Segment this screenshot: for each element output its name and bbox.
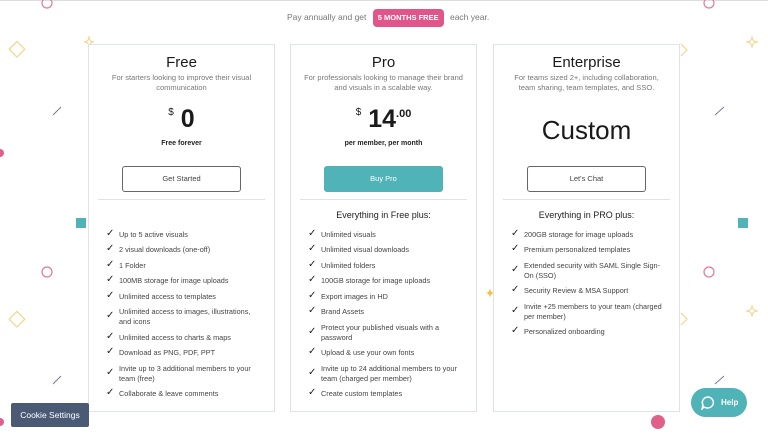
panel: pro: Create custom templates xyxy=(321,389,402,398)
panel: pro xyxy=(290,44,477,412)
panel: pro: For professionals looking to manage their brand and visuals in a scalable way. xyxy=(304,73,463,92)
panel: enterprise: Personalized onboarding xyxy=(524,327,605,336)
panel: pro: Pro xyxy=(372,54,395,71)
panel: free: Free xyxy=(166,54,197,71)
panel: free: Download as PNG, PDF, PPT xyxy=(119,348,215,357)
cookie settings button xyxy=(11,403,89,427)
panel: enterprise: Everything in PRO plus: xyxy=(539,210,634,220)
panel: free: $ 0 xyxy=(168,105,195,133)
panel: pro: Upload & use your own fonts xyxy=(321,348,414,357)
panel: pro: Unlimited visuals xyxy=(321,230,376,239)
panel: pro: $ 14.00 xyxy=(356,105,411,133)
panel: free: Up to 5 active visuals xyxy=(119,230,188,239)
top border line xyxy=(0,0,768,1)
panel: free: Get Started xyxy=(162,174,201,183)
help button xyxy=(691,388,747,417)
panel: pro: Everything in Free plus: xyxy=(336,210,431,220)
panel: enterprise: Custom xyxy=(542,115,631,145)
panel: enterprise: 200GB storage for image uploads xyxy=(524,230,633,239)
panel: pro: 100GB storage for image uploads xyxy=(321,276,430,285)
panel: free: Unlimited access to templates xyxy=(119,292,216,301)
panel: enterprise: Let's Chat xyxy=(570,174,603,183)
panel: pro: Unlimited folders xyxy=(321,261,375,270)
panel: pro: Buy Pro xyxy=(370,174,397,183)
panel: free: For starters looking to improve their visual communication xyxy=(112,73,251,92)
panel: pro: Unlimited visual downloads xyxy=(321,245,409,254)
panel: enterprise: Security Review & MSA Support xyxy=(524,286,628,295)
panel: pro: Protect your published visuals with a password xyxy=(321,323,439,342)
panel: free: 2 visual downloads (one-off) xyxy=(119,245,210,254)
panel: free: 100MB storage for image uploads xyxy=(119,276,229,285)
panel: enterprise: Extended security with SAML Single Sign-On (SSO) xyxy=(524,261,660,280)
panel: enterprise: For teams sized 2+, including collaboration, team sharing, team templates, and SSO. xyxy=(514,73,659,92)
panel: free xyxy=(88,44,275,412)
panel: enterprise: Enterprise xyxy=(552,54,621,71)
annual banner: 5 MONTHS FREE xyxy=(378,13,439,22)
panel: enterprise xyxy=(493,44,680,412)
panel: pro: per member, per month xyxy=(345,140,422,147)
panel: free: Free forever xyxy=(161,140,202,147)
panel: enterprise: Invite +25 members to your team (charged per member) xyxy=(524,302,662,321)
panel: pro: Invite up to 24 additional members to your team (charged per member) xyxy=(321,364,457,383)
panel: enterprise: Premium personalized templates xyxy=(524,245,630,254)
panel: free: 1 Folder xyxy=(119,261,146,270)
panel: pro: Export images in HD xyxy=(321,292,388,301)
panel: free: Unlimited access to charts & maps xyxy=(119,333,231,342)
cookie settings button: Cookie Settings xyxy=(20,410,80,420)
panel: free: Collaborate & leave comments xyxy=(119,389,218,398)
panel: pro: Brand Assets xyxy=(321,307,364,316)
annual banner xyxy=(287,9,489,27)
annual banner: Pay annually and get each year. xyxy=(287,12,489,22)
panel: free: Unlimited access to images, illustrations, and icons xyxy=(119,307,250,326)
panel: free: Invite up to 3 additional members to your team (free) xyxy=(119,364,251,383)
help button: Help xyxy=(721,398,738,407)
